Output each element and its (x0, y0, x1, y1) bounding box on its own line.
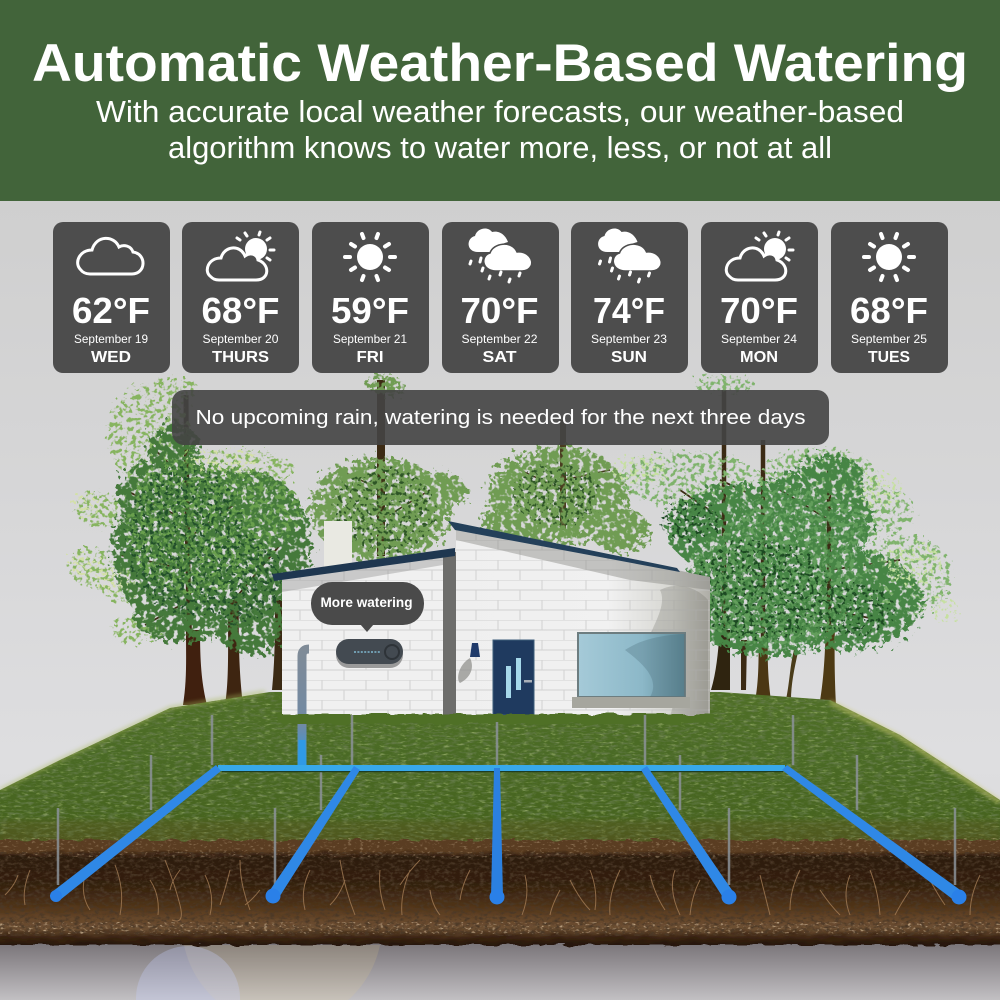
irrigation pipes (50, 740, 966, 904)
wall lamp (458, 643, 480, 683)
card: Saturday: 70°F (460, 290, 538, 331)
card: Monday: 70°F (720, 290, 798, 331)
rain stakes (58, 715, 955, 885)
right trees (610, 375, 959, 720)
card: Saturday: September 22 (462, 332, 538, 346)
card: Sunday: September 23 (591, 332, 667, 346)
header band (0, 0, 1000, 201)
card: Saturday (442, 222, 559, 373)
back centre trees (310, 375, 650, 562)
tree foliage: dense crown (112, 424, 311, 655)
title: Automatic Weather-Based Watering (32, 34, 968, 93)
card: Friday: September 21 (333, 332, 407, 346)
card: Tuesday: 68°F (850, 290, 928, 331)
card: Wednesday: 62°F (72, 290, 150, 331)
ground: grass (0, 692, 1000, 850)
card: Friday: FRI (356, 349, 384, 366)
subtitle: algorithm knows to water more, less, or not at all (168, 130, 832, 165)
speech bubble: More watering (320, 595, 412, 610)
right roof (448, 521, 680, 572)
card: Thursday: THURS (212, 349, 269, 366)
door (493, 640, 534, 715)
left roof (272, 548, 455, 581)
card: Friday: 59°F (331, 290, 409, 331)
card: Tuesday: TUES (868, 349, 910, 366)
card: Tuesday (831, 222, 948, 373)
tree foliage (310, 375, 650, 562)
card: Monday (701, 222, 818, 373)
house (272, 521, 710, 765)
ground: soil cross-section (0, 838, 1000, 945)
tree foliage: sparse upper crown (620, 375, 953, 615)
card: Sunday: 74°F (593, 290, 665, 331)
watering status banner: No upcoming rain, watering is needed for the next three days (196, 407, 806, 429)
card: Wednesday: September 19 (74, 332, 148, 346)
card: Wednesday (53, 222, 170, 373)
tree foliage: dense crown (667, 456, 922, 656)
subtitle (96, 94, 904, 165)
tree foliage: sparse upper crown (70, 378, 295, 644)
forecast cards (53, 222, 948, 373)
card: Friday (312, 222, 429, 373)
left trees (68, 378, 311, 705)
grass along house base (278, 714, 714, 724)
card: Thursday: September 20 (202, 332, 279, 346)
card: Thursday (182, 222, 299, 373)
card: Tuesday: September 25 (851, 332, 927, 346)
card: Wednesday: WED (91, 349, 131, 366)
card: Monday: MON (740, 349, 778, 366)
window (572, 633, 690, 708)
under-ground shadow (0, 935, 1000, 1000)
card: Monday: September 24 (721, 332, 797, 346)
subtitle: With accurate local weather forecasts, our weather-based (96, 94, 904, 129)
control device (336, 639, 403, 668)
roots (5, 860, 980, 921)
card: Sunday (571, 222, 688, 373)
lens flare (136, 945, 380, 1000)
chimney (324, 521, 352, 567)
card: Thursday: 68°F (202, 290, 280, 331)
speech bubble (311, 582, 424, 632)
gray supply pipe (302, 649, 309, 765)
scene background (0, 201, 1000, 1000)
card: Saturday: SAT (482, 349, 517, 366)
watering status banner (172, 390, 829, 445)
card: Sunday: SUN (611, 349, 647, 366)
